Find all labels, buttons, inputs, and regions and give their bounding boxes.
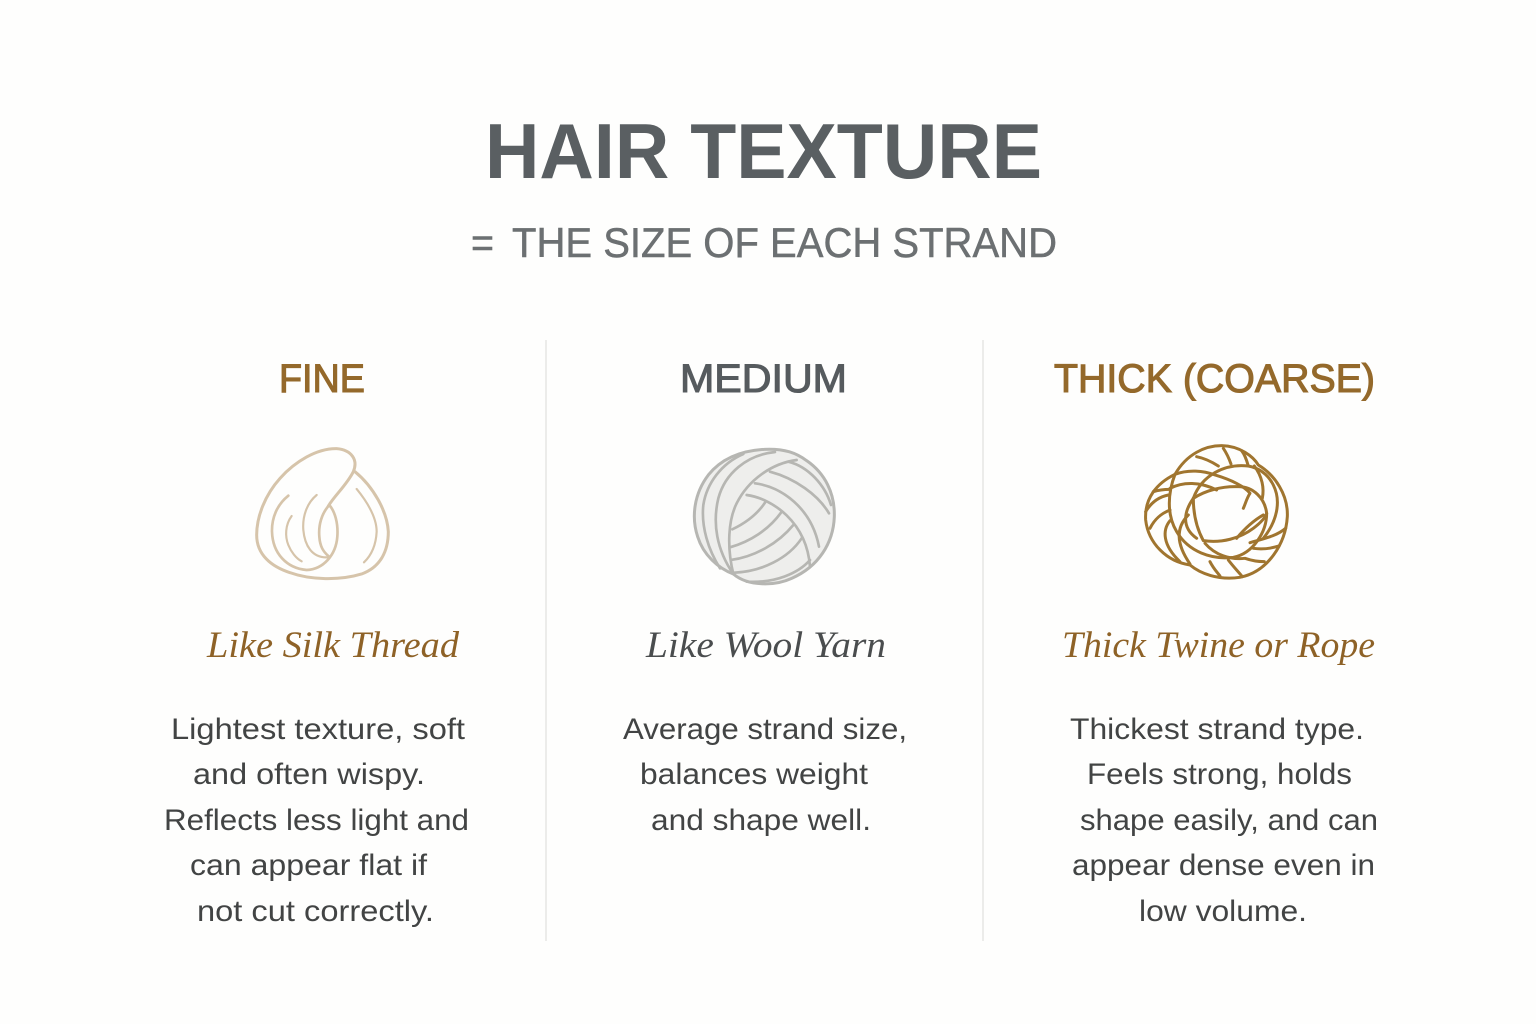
description: thick: Feels strong, holds bbox=[1087, 758, 1352, 791]
title: HAIR TEXTURE bbox=[485, 107, 1042, 195]
heading: medium: MEDIUM bbox=[680, 357, 847, 401]
panel: fine bbox=[164, 357, 469, 928]
panel: thick bbox=[1054, 357, 1378, 928]
heading: thick (coarse): THICK (COARSE) bbox=[1054, 357, 1375, 401]
description: medium: balances weight bbox=[640, 758, 869, 791]
description: fine: not cut correctly. bbox=[197, 895, 434, 928]
icon: silk strand bbox=[257, 449, 388, 579]
label: thick twine or rope: Thick Twine or Rope bbox=[1062, 625, 1375, 666]
heading: fine: FINE bbox=[279, 357, 365, 401]
icon: coiled rope bbox=[1146, 446, 1287, 578]
description: thick: appear dense even in bbox=[1072, 849, 1375, 882]
description: thick bbox=[1070, 713, 1378, 928]
description: fine: can appear flat if bbox=[190, 849, 428, 882]
description: medium: Average strand size, bbox=[623, 713, 907, 746]
description: medium: and shape well. bbox=[651, 804, 871, 837]
subtitle: = bbox=[471, 219, 494, 266]
description: thick: Thickest strand type. bbox=[1070, 713, 1364, 746]
description: thick: shape easily, and can bbox=[1080, 804, 1378, 837]
panel: medium bbox=[623, 357, 907, 837]
subtitle: THE SIZE OF EACH STRAND bbox=[512, 219, 1057, 266]
description: medium bbox=[623, 713, 907, 837]
description: fine bbox=[164, 713, 469, 928]
label: like silk thread: Like Silk Thread bbox=[206, 625, 460, 666]
description: thick: low volume. bbox=[1139, 895, 1307, 928]
description: fine: Lightest texture, soft bbox=[171, 713, 466, 746]
description: fine: and often wispy. bbox=[193, 758, 425, 791]
description: fine: Reflects less light and bbox=[164, 804, 469, 837]
icon: wool yarn ball bbox=[694, 449, 834, 584]
label: like wool yarn: Like Wool Yarn bbox=[645, 625, 886, 666]
